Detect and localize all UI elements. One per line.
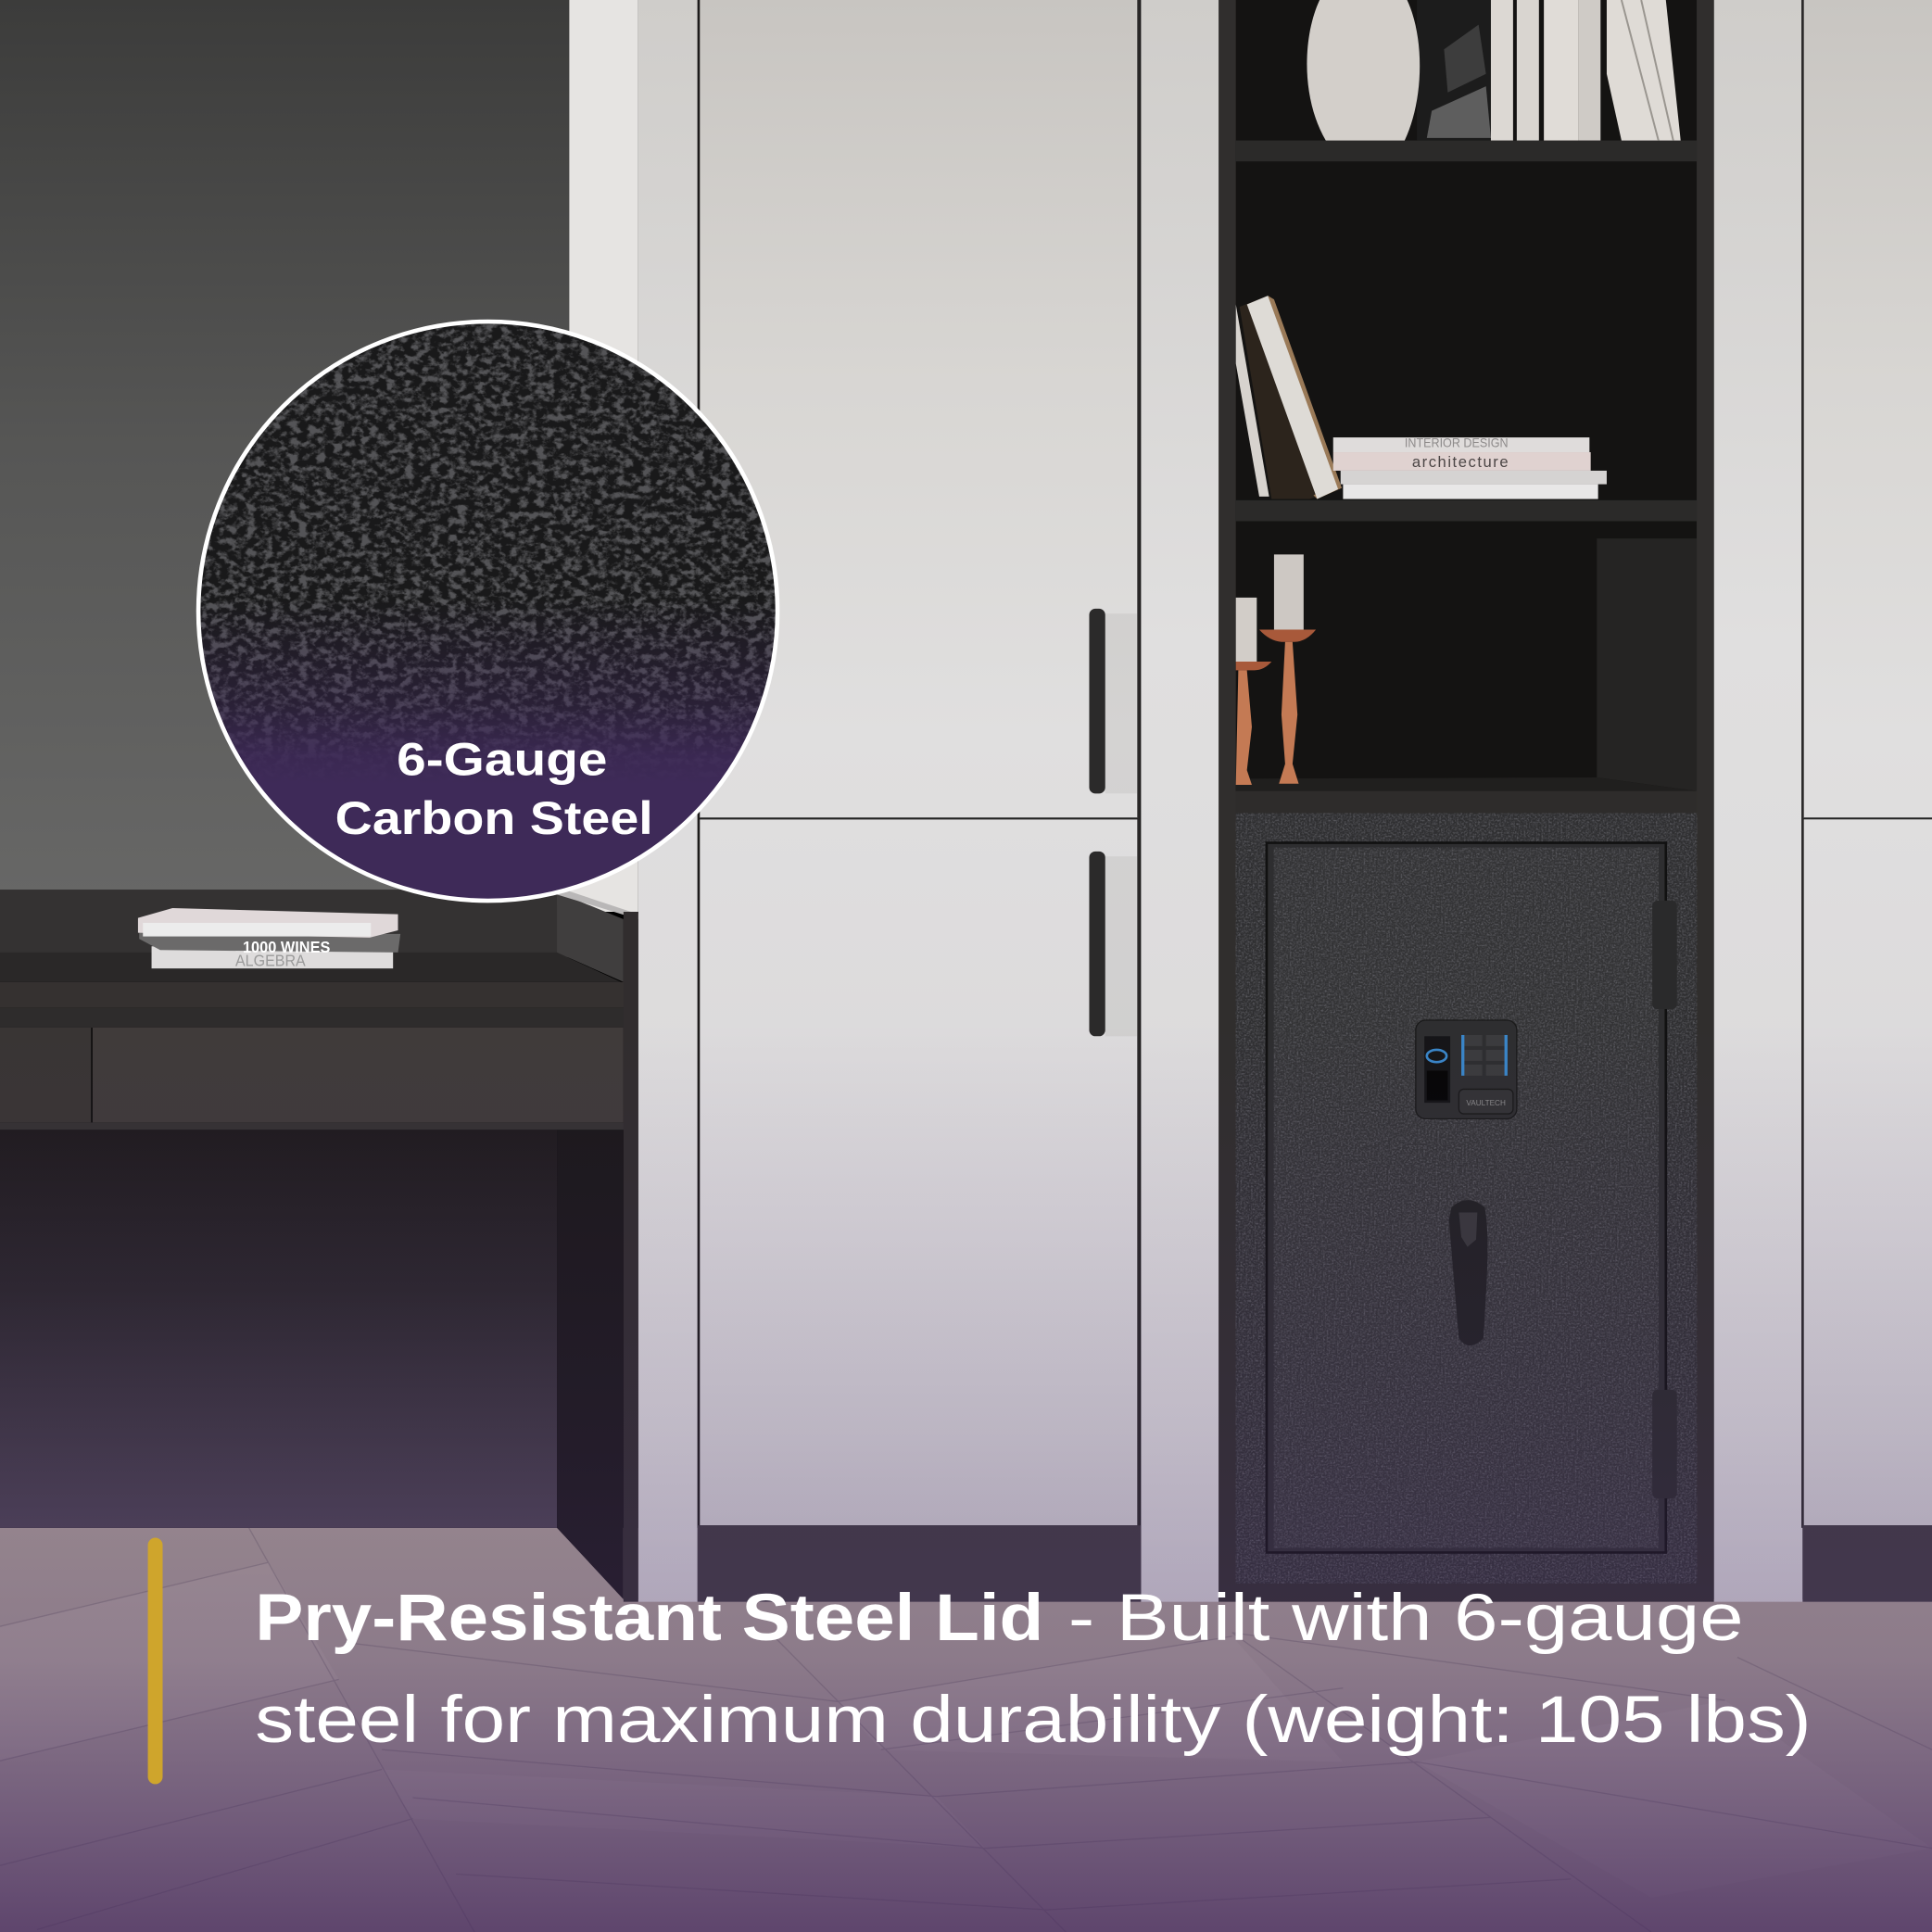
circle label (335, 732, 653, 844)
desk (0, 887, 638, 1602)
floor (0, 1528, 1932, 1932)
lower fade overlay (0, 1023, 1932, 1932)
white cabinetry wall (569, 0, 1804, 1602)
middle shelf books: architecture (1412, 453, 1509, 471)
books on desk: 1000 WINES (243, 938, 330, 956)
caption text: Pry-Resistant Steel Lid (255, 1581, 1043, 1655)
upper cabinet door with handle (700, 0, 1137, 818)
books on desk: ALGEBRA (235, 951, 306, 969)
books on desk (138, 908, 400, 969)
caption text (255, 1581, 1812, 1757)
right side cabinet doors (1804, 0, 1932, 1525)
caption text: - Built with 6-gauge (1068, 1581, 1744, 1655)
circle label: 6-Gauge (397, 732, 608, 785)
keypad lock (1416, 1020, 1517, 1118)
lower cabinet door with handle (700, 819, 1137, 1525)
shelving unit (1219, 0, 1714, 1602)
handle (1449, 1200, 1487, 1345)
accent bar (148, 1537, 163, 1784)
room background wall (0, 0, 569, 893)
middle shelf books: INTERIOR DESIGN (1405, 436, 1509, 450)
caption text: steel for maximum durability (weight: 105 lbs) (255, 1683, 1812, 1757)
safe door (1267, 843, 1666, 1552)
keypad lock: VAULTECH (1466, 1099, 1506, 1107)
inset circle: steel texture (197, 321, 778, 902)
cabinet toe kicks (698, 1525, 1932, 1602)
top shelf vase and books (1307, 0, 1681, 141)
circle label: Carbon Steel (335, 791, 653, 844)
middle shelf books (1236, 296, 1607, 499)
candles and copper holders (1236, 554, 1316, 785)
safe (1236, 814, 1697, 1584)
hinges (1652, 901, 1677, 1498)
